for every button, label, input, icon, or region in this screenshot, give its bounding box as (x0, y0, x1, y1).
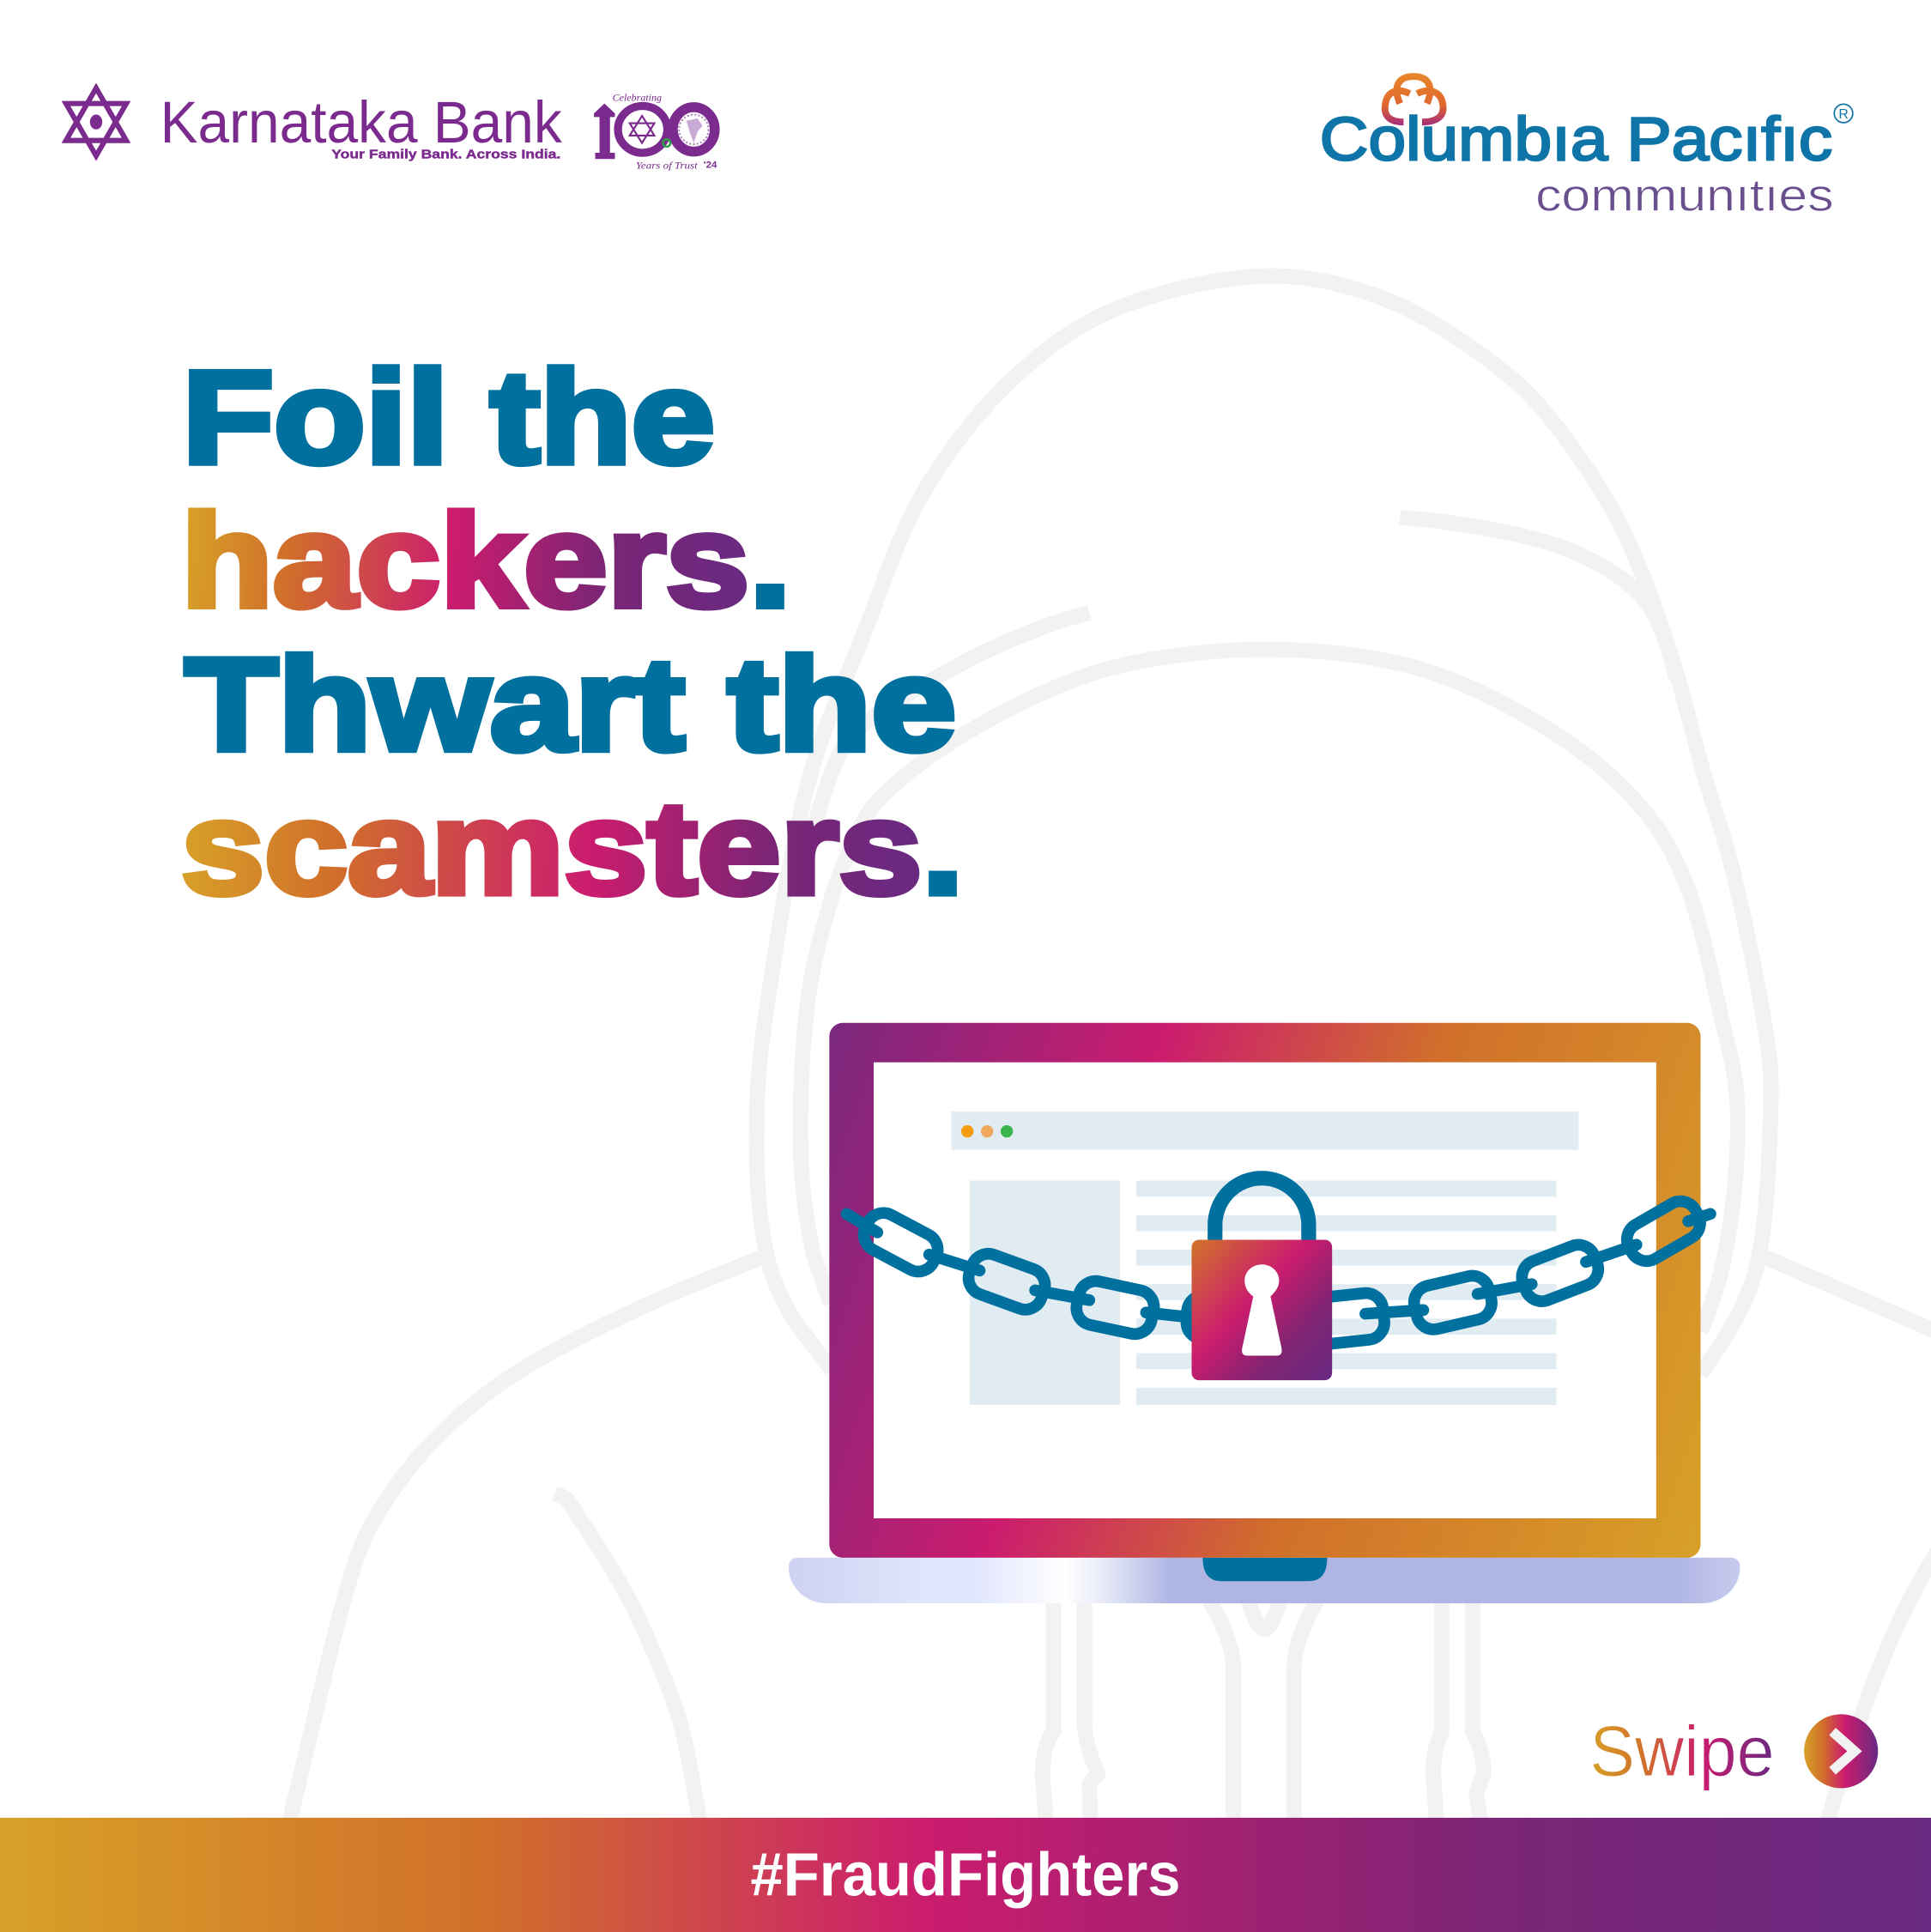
pillar numeral one (594, 104, 614, 159)
padlock body (1191, 1239, 1332, 1380)
padlock shackle (1215, 1178, 1309, 1245)
chain (846, 1195, 1710, 1346)
headline line 4: scamsters . (181, 774, 964, 922)
hashtag: #FraudFighters (750, 1840, 1181, 1909)
padlock keyhole (1242, 1264, 1282, 1355)
browser address bar (951, 1111, 1578, 1150)
laptop (789, 1023, 1740, 1603)
browser content lines (1136, 1181, 1556, 1405)
Celebrating script: Celebrating (613, 94, 662, 104)
hooded hacker line art (286, 276, 1931, 1836)
swipe prompt (1589, 1711, 1878, 1791)
centenary logo (594, 94, 717, 172)
padlock (1191, 1178, 1332, 1380)
Karnataka Bank logo (66, 88, 562, 162)
hashtag footer band (0, 1818, 1931, 1932)
company name: Columbıa Pacıfıc (1320, 106, 1832, 174)
Years of Trust script: Years of Trust (636, 161, 699, 172)
headline line 1: Foil the (183, 343, 715, 491)
headline line 3: Thwart the (185, 631, 956, 778)
headline (181, 343, 964, 922)
icon: India seal (679, 115, 709, 144)
registered mark (1834, 104, 1853, 123)
arrow button (1804, 1714, 1878, 1788)
icon: star of David emblem (66, 88, 126, 156)
headline line 2: hackers . (181, 487, 791, 634)
registered mark: R (1838, 107, 1849, 122)
Columbia Pacific logo (1320, 76, 1853, 221)
communities: communıtıes (1535, 171, 1834, 221)
bank name: Karnataka Bank (160, 89, 562, 155)
year: '24 (704, 160, 717, 170)
two rings (618, 106, 668, 153)
laptop screen (874, 1063, 1656, 1518)
icon: tree (1385, 76, 1444, 122)
browser sidebar (970, 1181, 1120, 1405)
laptop base (789, 1558, 1740, 1603)
green link (663, 139, 670, 147)
icon: small star (630, 116, 654, 143)
laptop notch (1202, 1558, 1327, 1581)
laptop frame (829, 1023, 1700, 1558)
bank tagline: Your Family Bank. Across India. (331, 148, 560, 162)
swipe label: Swipe (1589, 1711, 1775, 1791)
